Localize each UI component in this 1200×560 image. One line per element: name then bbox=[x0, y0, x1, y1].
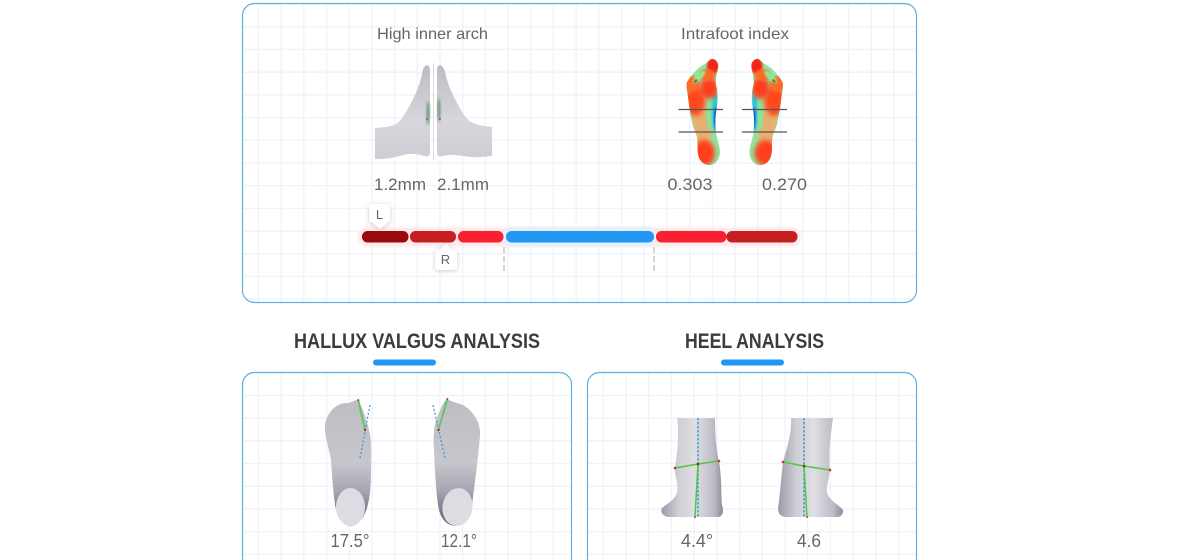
scale bar bbox=[358, 227, 801, 272]
panel: heel bbox=[588, 372, 916, 560]
heading: heel analysis: HEEL ANALYSIS bbox=[685, 330, 824, 353]
icon: pressure heat map feet bbox=[678, 55, 790, 170]
value: right arch height: 2.1mm bbox=[437, 175, 489, 194]
heading: intrafoot index: Intrafoot index bbox=[681, 26, 789, 43]
heading: high inner arch: High inner arch bbox=[377, 26, 488, 43]
marker: L bbox=[369, 204, 390, 229]
value: left hallux angle: 17.5° bbox=[330, 531, 370, 551]
value: left arch height: 1.2mm bbox=[374, 175, 426, 194]
heading: hallux valgus analysis: HALLUX VALGUS ANALYSIS bbox=[294, 330, 540, 353]
icon: left heel bbox=[661, 418, 723, 518]
marker: L: L bbox=[376, 207, 383, 222]
marker: R: R bbox=[441, 252, 450, 267]
icon: left foot sole bbox=[325, 399, 371, 526]
panel: foot arch and intrafoot index bbox=[242, 4, 916, 302]
heading underline: heel analysis bbox=[721, 360, 784, 366]
heading underline: hallux valgus bbox=[373, 360, 436, 366]
icon: right heel bbox=[778, 418, 843, 518]
marker: R bbox=[435, 244, 457, 270]
panel: hallux valgus bbox=[242, 372, 572, 560]
value: right hallux angle: 12.1° bbox=[441, 531, 477, 551]
icon: arch footprints bbox=[375, 63, 492, 160]
value: right heel angle: 4.6 bbox=[797, 531, 821, 551]
icon: right foot sole bbox=[433, 398, 480, 528]
value: right intrafoot index: 0.270 bbox=[762, 175, 807, 194]
value: left intrafoot index: 0.303 bbox=[668, 175, 712, 194]
value: left heel angle: 4.4° bbox=[681, 531, 713, 551]
